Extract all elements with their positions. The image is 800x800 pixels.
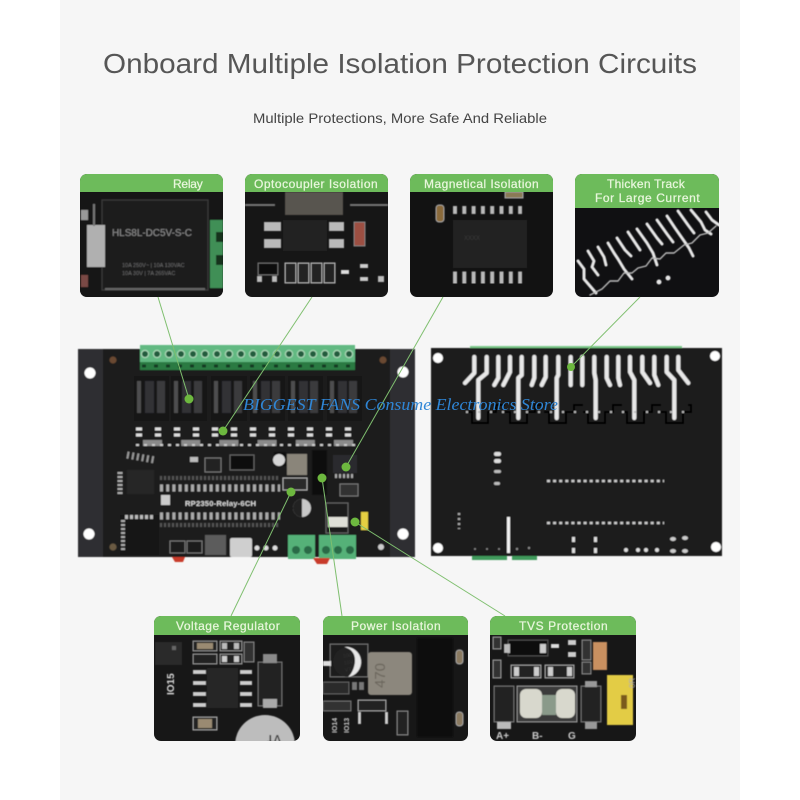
panel: TVS protection <box>490 616 637 742</box>
title: Onboard Multiple Isolation Protection Circuits <box>103 48 697 79</box>
photo: TVS close-up: B- <box>532 731 543 742</box>
callout: relay <box>158 297 194 404</box>
header: magnetical isolation <box>410 174 553 192</box>
photo: thick copper tracks <box>578 210 719 295</box>
photo: regulator close-up: IO15 <box>166 673 177 695</box>
panel: relay <box>80 174 223 297</box>
header: relay <box>80 174 223 192</box>
callout: TVS protection <box>350 518 505 616</box>
panel: magnetical isolation <box>410 174 553 297</box>
header: voltage regulator: Voltage Regulator <box>176 619 280 633</box>
header: TVS protection <box>490 616 636 635</box>
header: optocoupler isolation <box>245 174 388 192</box>
panel: voltage regulator <box>154 616 300 741</box>
photo: regulator close-up <box>155 640 296 741</box>
photo: TVS close-up: 0R <box>628 678 637 688</box>
panel: thicken track <box>575 174 719 297</box>
header: TVS protection: TVS Protection <box>519 619 608 633</box>
header: thicken track: Thicken Track <box>607 177 686 191</box>
header: power isolation <box>323 616 468 635</box>
subtitle: Multiple Protections, More Safe And Reliable <box>253 110 547 126</box>
photo: regulator close-up: VT <box>267 732 281 744</box>
panel: optocoupler isolation <box>245 174 388 297</box>
callout lines and dots <box>158 297 640 616</box>
photo: isolated power close-up: 16V <box>343 659 354 667</box>
header: power isolation: Power Isolation <box>351 619 441 633</box>
photo: isolated power close-up: IO13 <box>344 718 351 733</box>
callout: thicken track <box>567 297 640 371</box>
photo: isolator chip close-up: XXXX <box>464 236 480 242</box>
back board photo <box>431 346 722 560</box>
header: thicken track: For Large Current <box>595 191 700 205</box>
photo: isolated power close-up: 100 <box>342 652 352 660</box>
photo: isolator chip close-up <box>436 192 527 279</box>
photo: relay close-up: 10A 30V | 7A 265VAC <box>122 271 175 277</box>
main board photo: front: RP2350-Relay-6CH <box>185 499 256 508</box>
photo: isolated power close-up: VT <box>344 667 353 674</box>
photo: relay close-up: 10A 250V~ | 10A 130VAC <box>122 263 185 269</box>
photo: TVS close-up: A+ <box>496 731 509 742</box>
main board photo: front <box>78 345 415 564</box>
photo: TVS close-up <box>493 637 637 742</box>
photo: isolated power close-up: IO14 <box>332 718 339 733</box>
photo: optocoupler close-up <box>245 192 388 283</box>
photo: isolated power close-up: 470 <box>372 663 389 688</box>
header: relay: Relay <box>173 177 203 191</box>
photo: TVS close-up: G <box>568 731 576 742</box>
header: thicken track <box>575 174 719 208</box>
header: optocoupler isolation: Optocoupler Isolation <box>254 177 378 191</box>
callout: optocoupler <box>218 297 312 436</box>
panel: power isolation <box>323 616 468 741</box>
photo: isolated power close-up <box>323 638 463 737</box>
photo: relay close-up <box>80 192 223 297</box>
header: magnetical isolation: Magnetical Isolation <box>424 177 539 191</box>
callout: voltage regulator <box>231 488 296 616</box>
header: voltage regulator <box>154 616 300 635</box>
callout: power isolation <box>318 474 342 616</box>
watermark: BIGGEST FANS Consume Electronics Store <box>243 395 558 414</box>
photo: relay close-up: HLS8L-DC5V-S-C <box>112 228 192 239</box>
callout: magnetical isolation <box>342 297 443 472</box>
